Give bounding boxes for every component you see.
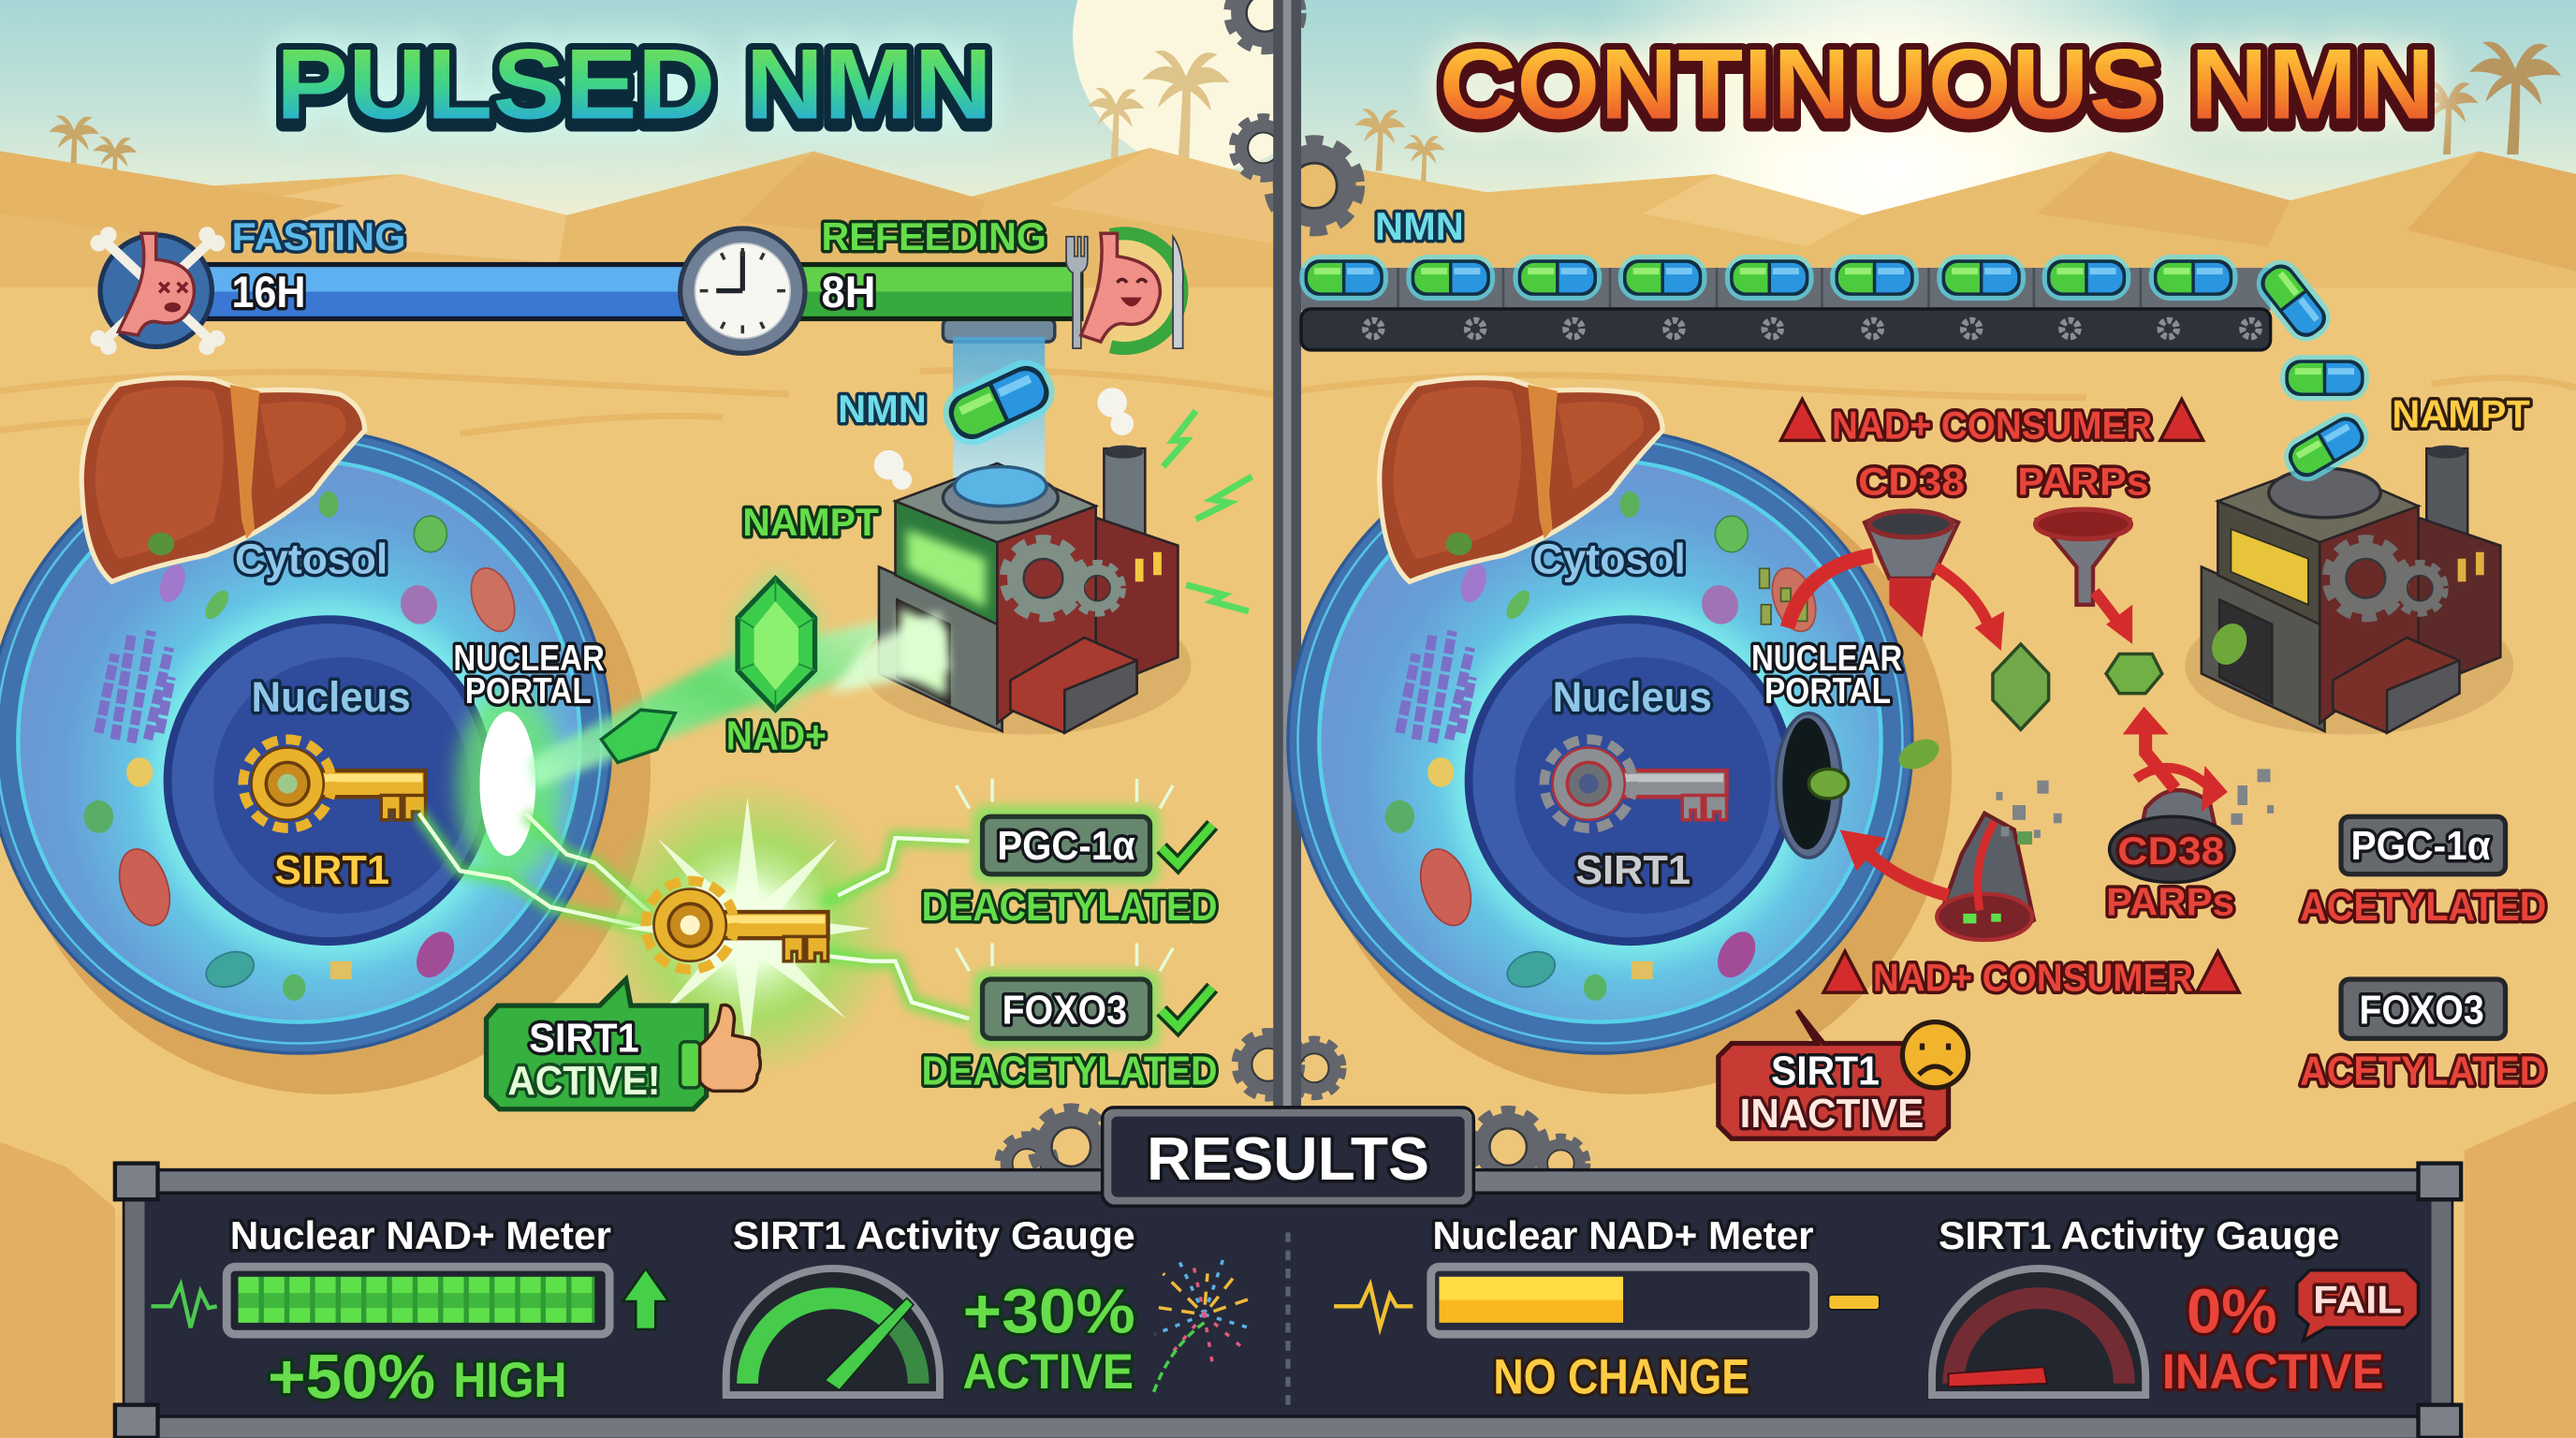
icon: gold key SIRT1 in nucleus bbox=[243, 740, 426, 829]
icon: NMN capsule falling bbox=[934, 351, 1063, 454]
icon: dash bbox=[1828, 1295, 1880, 1310]
label: NAMPT continuous: NAMPT bbox=[2392, 391, 2530, 435]
label: nuclear portal right: PORTAL bbox=[1764, 671, 1891, 712]
icon: beam burst at factory opening bbox=[829, 611, 949, 694]
icon: NAMPT factory dim bbox=[2185, 446, 2513, 735]
panel gears bbox=[999, 1109, 1587, 1191]
value: HIGH: HIGH bbox=[453, 1353, 567, 1408]
value: ACTIVE: ACTIVE bbox=[962, 1344, 1134, 1400]
callout: SIRT1 inactive bbox=[1719, 1010, 1969, 1138]
tag: FOXO3 deacetylated: FOXO3 bbox=[1003, 987, 1127, 1033]
icon: capsule entering factory bbox=[2276, 404, 2377, 489]
icon: liver bbox=[81, 378, 365, 581]
meter heading right: Nuclear NAD+ Meter bbox=[1432, 1213, 1814, 1257]
icon: smoke and sparks bbox=[874, 388, 1251, 611]
icon: big NAD+ gem bbox=[736, 570, 816, 718]
value: +30%: +30% bbox=[962, 1277, 1135, 1346]
label: cytosol: Cytosol bbox=[235, 536, 388, 583]
icon: NMN beam tube bbox=[943, 318, 1055, 493]
label: nuclear portal right bbox=[1751, 638, 1903, 712]
tag: PGC-1a deacetylated: DEACETYLATED bbox=[922, 884, 1218, 930]
tag: PGC-1a deacetylated: PGC-1α bbox=[997, 823, 1135, 869]
gauge heading right: SIRT1 Activity Gauge bbox=[1939, 1213, 2339, 1257]
tag: PGC-1a acetylated: ACETYLATED bbox=[2300, 884, 2546, 930]
label: cytosol right: Cytosol bbox=[1533, 536, 1686, 583]
tag: FOXO3 acetylated: FOXO3 bbox=[2359, 987, 2484, 1033]
lightning to targets bbox=[822, 838, 970, 1019]
tag: FOXO3 deacetylated: DEACETYLATED bbox=[922, 1048, 1218, 1093]
center divider bbox=[1230, 0, 1357, 1134]
gauge heading: SIRT1 Activity Gauge bbox=[733, 1213, 1135, 1257]
title: continuous: CONTINUOUS NMN bbox=[1439, 27, 2435, 139]
callout: fail bbox=[2297, 1270, 2419, 1341]
panel frame bbox=[115, 1164, 2461, 1438]
tag: PGC-1a acetylated: PGC-1α bbox=[2351, 823, 2491, 869]
icon: PARPs funnel with arrow bbox=[2036, 509, 2132, 644]
refeeding bar bbox=[798, 265, 1081, 318]
label: CD38 upper: CD38 bbox=[1858, 459, 1965, 503]
icon: nuclear portal closed bbox=[1776, 713, 1848, 858]
callout: SIRT1 inactive: SIRT1 bbox=[1771, 1048, 1880, 1093]
callout: SIRT1 active: SIRT1 bbox=[529, 1015, 639, 1061]
label: nuclear portal: NUCLEAR bbox=[453, 638, 605, 679]
callout: SIRT1 active: ACTIVE! bbox=[507, 1058, 661, 1104]
value: 0%: 0% bbox=[2187, 1277, 2277, 1346]
icon: fireworks bbox=[1150, 1257, 1251, 1393]
icon: consumed NAD+ crumbs bbox=[1760, 568, 1808, 624]
icon: NAMPT factory active bbox=[862, 446, 1191, 735]
falling capsules bbox=[2248, 252, 2369, 401]
label: NMN continuous: NMN bbox=[1375, 204, 1464, 248]
label: nucleus right: Nucleus bbox=[1553, 673, 1712, 721]
activated key burst bbox=[596, 777, 899, 1079]
icon: clock bbox=[681, 228, 805, 353]
label: PARPs lower: PARPs bbox=[2106, 880, 2234, 924]
warning: NAD+ consumer upper: NAD+ CONSUMER bbox=[1832, 404, 2152, 448]
icon: lower CD38 consumer bbox=[2110, 707, 2234, 882]
icon: happy stomach with fork and knife bbox=[1066, 233, 1183, 348]
gauge dial bbox=[726, 1269, 940, 1395]
label: nuclear portal right: NUCLEAR bbox=[1751, 638, 1903, 679]
meter heading: Nuclear NAD+ Meter bbox=[230, 1213, 611, 1257]
warning: NAD+ consumer lower: NAD+ CONSUMER bbox=[1873, 955, 2193, 999]
value: no change: NO CHANGE bbox=[1493, 1349, 1749, 1404]
fasting bar bbox=[200, 265, 694, 318]
gauge: pulsed SIRT1 bbox=[726, 1213, 1251, 1400]
refeeding label: REFEEDING bbox=[822, 214, 1046, 258]
icon: activated gold key bbox=[646, 881, 828, 970]
background: pulsed desert side bbox=[0, 0, 1342, 1438]
tag: PGC-1a acetylated bbox=[2300, 816, 2546, 930]
tag: FOXO3 acetylated bbox=[2300, 979, 2546, 1093]
icon: green pulse bbox=[151, 1284, 217, 1328]
label: nuclear portal: PORTAL bbox=[465, 671, 592, 712]
callout: SIRT1 inactive: INACTIVE bbox=[1740, 1091, 1924, 1137]
lightning from nuclear key bbox=[419, 814, 649, 929]
icon: depleted NAD+ gems bbox=[1894, 644, 2162, 775]
conveyor belt bbox=[1301, 268, 2271, 350]
label: PARPs upper: PARPs bbox=[2017, 459, 2149, 503]
icon: yellow pulse bbox=[1334, 1284, 1412, 1328]
icon: small NAD+ gem bbox=[601, 710, 675, 762]
fasting label: FASTING bbox=[231, 214, 406, 258]
meter: continuous nuclear NAD+ bbox=[1334, 1213, 1880, 1404]
continuous: NMN conveyor bbox=[1299, 204, 2369, 401]
icon: lower PARPs consumer bbox=[1840, 814, 2034, 940]
pulsed cell bbox=[0, 378, 651, 1094]
icon: liver right bbox=[1380, 378, 1662, 581]
title: pulsed: PULSED NMN bbox=[276, 27, 992, 139]
tag: FOXO3 acetylated: ACETYLATED bbox=[2300, 1048, 2546, 1093]
icon: NAD+ debris bbox=[1996, 769, 2274, 844]
heading: results: RESULTS bbox=[1147, 1124, 1429, 1193]
continuous cell bbox=[1288, 378, 1952, 1094]
icon: sad face bbox=[1902, 1022, 1969, 1088]
label: SIRT1: SIRT1 bbox=[274, 847, 389, 893]
icon: gray inactive key bbox=[1544, 740, 1727, 829]
callout: SIRT1 active bbox=[487, 979, 760, 1109]
icon: thumbs up bbox=[681, 1005, 760, 1091]
tag: PGC-1a deacetylated bbox=[922, 779, 1218, 930]
meter bar right bbox=[1431, 1267, 1814, 1334]
label: CD38 lower: CD38 bbox=[2117, 829, 2224, 873]
gauge dial right bbox=[1932, 1269, 2145, 1395]
heading: results bbox=[1103, 1108, 1473, 1206]
icon: CD38 funnel with arrows bbox=[1788, 511, 2004, 651]
label: SIRT1 inactive: SIRT1 bbox=[1575, 847, 1690, 893]
fasting refeeding timeline bbox=[91, 214, 1183, 355]
meter: pulsed nuclear NAD+ bbox=[151, 1213, 668, 1413]
label: nucleus: Nucleus bbox=[252, 673, 411, 721]
icon: starving stomach with crossbones bbox=[91, 227, 225, 355]
icon: up arrow bbox=[622, 1269, 668, 1329]
label: NAMPT pulsed: NAMPT bbox=[742, 500, 879, 544]
callout: fail: FAIL bbox=[2313, 1277, 2402, 1321]
meter bar bbox=[227, 1267, 609, 1334]
value: inactive: INACTIVE bbox=[2162, 1344, 2384, 1400]
value: +50%: +50% bbox=[268, 1343, 435, 1413]
capsules on belt bbox=[1299, 255, 2237, 301]
tag: FOXO3 deacetylated bbox=[922, 943, 1218, 1093]
background: continuous desert side bbox=[1288, 0, 2576, 1438]
label: nuclear portal bbox=[453, 638, 605, 712]
label: NAD+: NAD+ bbox=[726, 712, 827, 758]
results panel bbox=[115, 1108, 2461, 1438]
icon: nuclear portal open bbox=[457, 690, 562, 881]
fasting hours: 16H bbox=[231, 268, 305, 317]
green NAD+ beam bbox=[529, 608, 944, 788]
gauge: continuous SIRT1 bbox=[1932, 1213, 2419, 1400]
label: NMN pulsed: NMN bbox=[838, 387, 927, 431]
refeeding hours: 8H bbox=[822, 268, 875, 317]
